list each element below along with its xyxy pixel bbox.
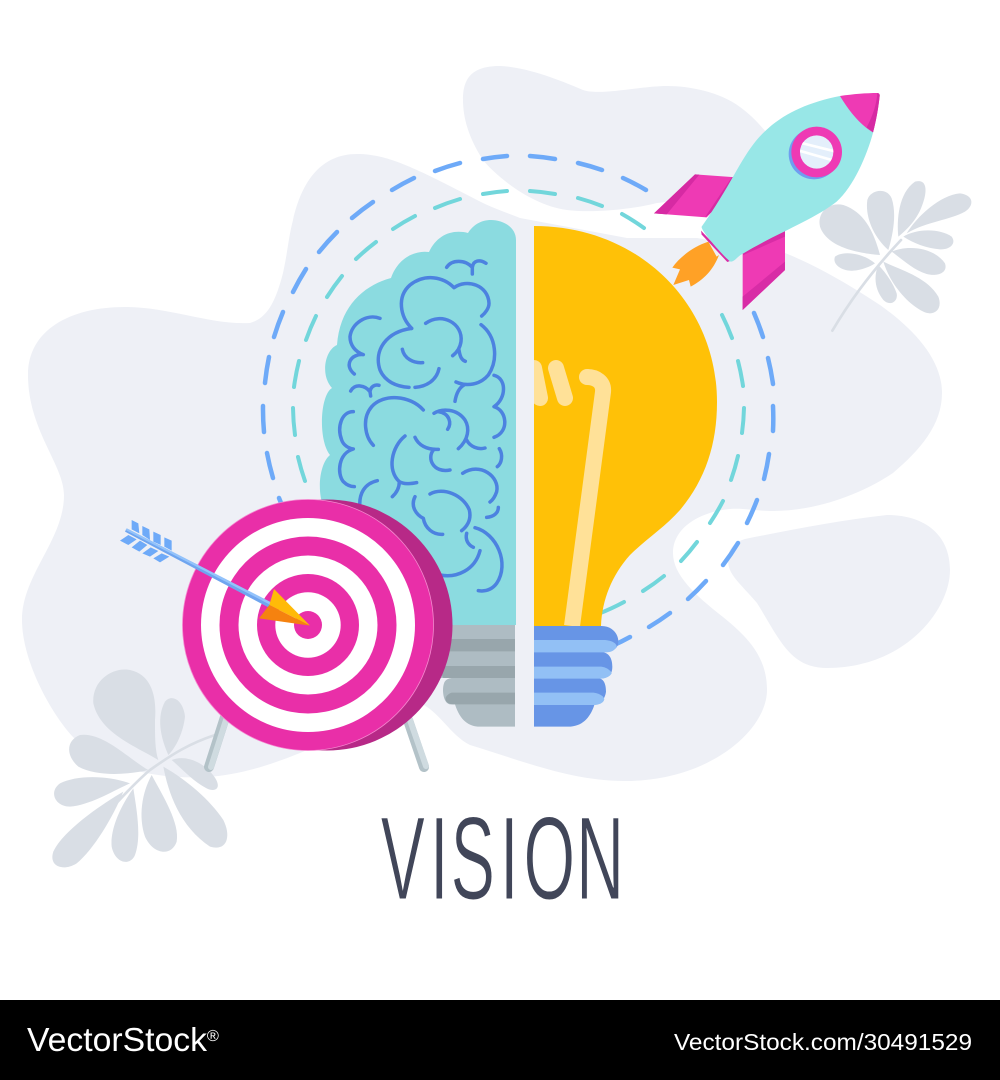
target board <box>182 500 452 750</box>
brain folds lower <box>413 491 502 591</box>
background blobs <box>22 66 950 781</box>
brain stem base <box>430 625 515 727</box>
filament <box>534 368 603 626</box>
icon: leaf sprig top right <box>819 181 971 331</box>
brain half <box>320 220 516 625</box>
light bulb <box>534 226 717 626</box>
flame <box>672 242 719 287</box>
rocket body <box>702 96 873 262</box>
bulb screw base <box>534 626 618 727</box>
icon: leaf sprig bottom left <box>52 669 227 867</box>
watermark bar: VectorStock <box>27 1021 203 1058</box>
left fin <box>654 174 737 217</box>
watermark bar: VectorStock.com/30491529 <box>674 1029 972 1055</box>
rocket base edge <box>701 231 730 262</box>
dashed orbit inner <box>293 191 744 614</box>
brain folds upper <box>340 261 505 508</box>
watermark bar <box>0 1000 1000 1080</box>
watermark bar: ® <box>207 1028 219 1045</box>
arrow <box>120 520 310 626</box>
title: VISION <box>381 793 624 925</box>
target legs <box>209 717 426 767</box>
right fin <box>743 230 785 310</box>
dashed orbit outer <box>263 156 773 646</box>
nose cone <box>840 93 880 132</box>
porthole window <box>789 127 842 179</box>
rocket <box>654 93 880 310</box>
